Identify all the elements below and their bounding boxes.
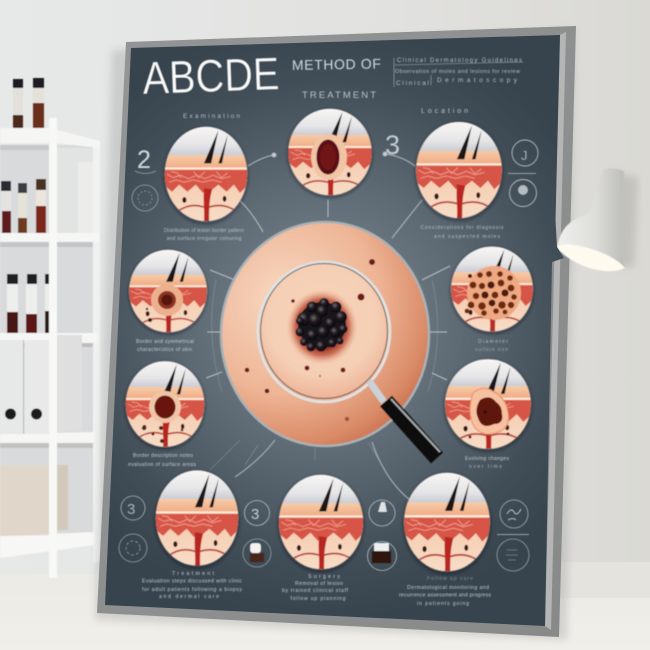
caption: Distribution of lesion border pattern (164, 228, 244, 234)
lamp (557, 168, 638, 271)
centre skin disc and magnifier (221, 222, 440, 458)
caption (420, 225, 504, 240)
caption (136, 339, 194, 353)
caption: and surface irregular colouring (166, 236, 242, 242)
connector lines (206, 152, 450, 500)
icon group: right top: J (521, 148, 528, 163)
panel: bottom middle circle (243, 475, 364, 602)
skirting board (560, 562, 650, 598)
header note: Observation of moles and lesions for review (395, 69, 520, 75)
title: ABCDE: ABCDE (142, 47, 280, 104)
caption: and dermal care (159, 594, 219, 600)
number 2: 2 (137, 146, 151, 174)
header note: Dermatoscopy (437, 77, 518, 84)
panel: bottom middle circle: 3 (251, 506, 259, 523)
caption (142, 571, 242, 600)
caption: Considerations for diagnosis (420, 225, 504, 231)
title (142, 47, 382, 104)
skin diagram (125, 361, 205, 449)
icon group: left top (132, 171, 158, 211)
caption: Diameter (478, 339, 508, 345)
panel: bottom left circle: 3 (127, 501, 135, 518)
skin diagram (450, 247, 534, 334)
header note: Clinical (396, 80, 430, 87)
panel: bottom right circle (368, 473, 529, 607)
heading: Examination (183, 113, 240, 120)
panel: left middle circle (128, 250, 208, 353)
caption: over time (469, 464, 502, 470)
caption: Follow up care (427, 576, 473, 582)
round icon (119, 534, 147, 562)
caption (465, 456, 510, 470)
magnifier handle (369, 381, 384, 402)
caption: Dermatological monitoring and (407, 585, 489, 591)
floor (0, 574, 650, 650)
skin diagram (128, 250, 208, 335)
skin diagram (403, 473, 491, 574)
storage box (0, 465, 49, 536)
frame highlight (545, 32, 566, 630)
number 3 top: 3 (385, 130, 400, 160)
title: method of: METHOD OF (292, 55, 382, 73)
caption: follow up planning (290, 596, 346, 602)
skin diagram (444, 359, 532, 452)
caption: surface size (475, 347, 508, 353)
binders (0, 340, 24, 434)
caption: for adult patients following a biopsy (142, 587, 242, 593)
header note (394, 58, 523, 87)
rear upright (93, 142, 100, 562)
poster shadow (95, 30, 575, 640)
skin diagram (287, 109, 373, 198)
caption: Removal of lesion (295, 581, 343, 587)
caption (399, 576, 491, 607)
caption: Evaluation steps discussed with clinic (142, 578, 242, 584)
panel: top centre circle (287, 108, 468, 198)
bottles, second shelf (1, 179, 46, 233)
caption (128, 453, 196, 468)
title: treatment: TREATMENT (302, 90, 376, 101)
sample jar icon (368, 542, 396, 570)
caption: and suspected moles (434, 234, 500, 240)
number 3 icon (244, 500, 270, 526)
panel: right lower circle, irregular lesion (444, 359, 532, 470)
icon group: right top (508, 140, 538, 206)
skin diagram (155, 470, 239, 569)
melanoma lesion (286, 289, 358, 365)
shelf back and shadows (0, 145, 96, 540)
right side icons (500, 500, 528, 528)
header note: Clinical Dermatology Guidelines (397, 58, 522, 64)
caption (164, 228, 244, 242)
skin diagram (278, 475, 364, 572)
shelf unit (0, 78, 100, 578)
heading: Location (421, 108, 468, 115)
skin diagram (164, 127, 248, 224)
caption: Evolving changes (465, 456, 510, 462)
caption: by trained clinical staff (282, 588, 349, 594)
magnifier lens (258, 262, 390, 402)
caption (282, 574, 349, 602)
shelf boards (0, 128, 100, 148)
poster content (119, 47, 538, 607)
caption: characteristics of skin (137, 347, 192, 353)
poster board (105, 35, 564, 626)
bottles, third shelf (7, 274, 50, 333)
front upright (49, 118, 57, 578)
panel: top left circle (164, 113, 248, 242)
faint rings around disc (210, 280, 438, 470)
panel: left lower circle (125, 361, 205, 468)
caption: in patients going (417, 601, 469, 607)
sample jar icon (243, 539, 271, 567)
caption: evaluation of surface areas (128, 462, 196, 468)
caption: Border and symmetrical (136, 339, 194, 345)
caption: Surgery (308, 574, 340, 580)
poster frame (97, 26, 576, 637)
panel: right upper circle, multicoloured lesion (450, 247, 534, 353)
step numbers (137, 130, 400, 174)
lens spots (291, 294, 364, 377)
panel: bottom left circle (119, 470, 242, 600)
skin diagram (415, 122, 503, 221)
caption (475, 339, 508, 353)
panel: top right circle (415, 122, 504, 240)
lesion (311, 134, 347, 180)
cone icon (369, 500, 395, 526)
caption: Border description notes (133, 453, 194, 459)
caption: recurrence assessment and progress (399, 592, 491, 598)
caption: Treatment (172, 571, 215, 577)
bottles, top shelf (13, 78, 44, 128)
skin disc (221, 222, 429, 446)
number 3 icon (121, 496, 145, 520)
skin spots (245, 259, 375, 421)
